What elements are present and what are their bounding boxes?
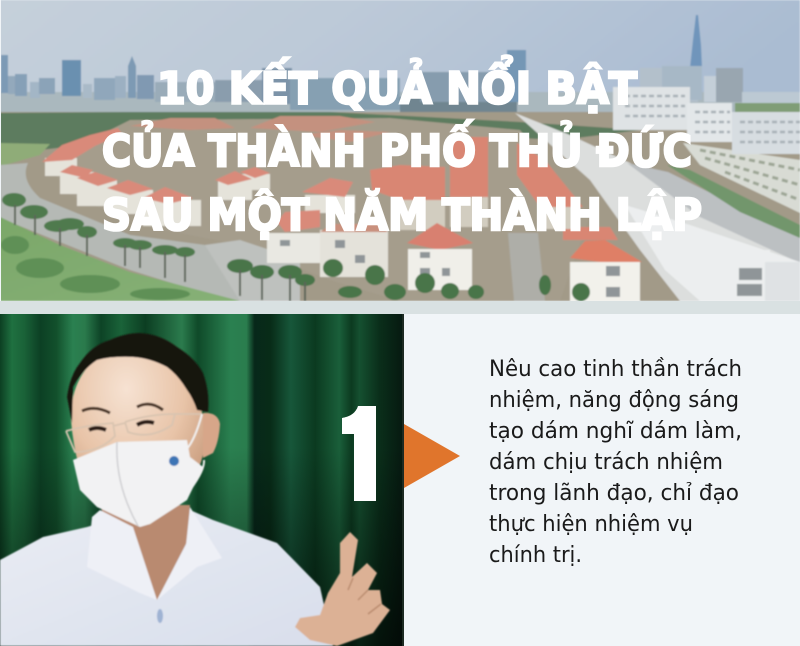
dark right edge bbox=[402, 314, 404, 646]
second villa red roof bbox=[570, 240, 642, 262]
title line 1: 10 KẾT QUẢ NỔI BẬT bbox=[157, 54, 637, 114]
mask strap bbox=[186, 414, 204, 490]
left lawn bbox=[0, 143, 50, 168]
distant skyline left bbox=[1, 55, 292, 104]
palm line bbox=[2, 193, 195, 257]
road centre front bbox=[508, 233, 545, 301]
line 3: tạo dám nghĩ dám làm, bbox=[489, 418, 742, 444]
tree belt bbox=[0, 112, 640, 150]
sky bbox=[1, 0, 800, 93]
lower left grass bbox=[0, 217, 240, 301]
man portrait bbox=[0, 333, 390, 646]
tree trunks bbox=[240, 270, 305, 301]
divider band bbox=[0, 301, 800, 314]
numeral text: 1 bbox=[325, 381, 400, 530]
number 1 bbox=[325, 381, 400, 530]
header aerial photo: Thu Duc city bbox=[0, 0, 800, 301]
face bbox=[71, 355, 203, 525]
green curtain backdrop bbox=[0, 314, 404, 646]
green verge bbox=[667, 165, 800, 238]
junction bbox=[205, 240, 300, 301]
orange arrow bbox=[404, 424, 460, 488]
ear bbox=[203, 413, 220, 458]
shirt button bbox=[157, 609, 163, 623]
apartment window rows bbox=[625, 96, 800, 142]
palm trunks bbox=[15, 205, 185, 282]
shirt collar left bbox=[87, 510, 157, 600]
right terrace housing bbox=[683, 143, 800, 213]
eyebrows bbox=[82, 404, 163, 413]
eyes bbox=[89, 422, 154, 430]
white foreground building bbox=[625, 205, 800, 301]
shirt collar right bbox=[157, 507, 222, 600]
title bbox=[102, 54, 702, 241]
mask logo bbox=[169, 456, 179, 466]
long white terrace block bbox=[515, 113, 800, 301]
line 5: trong lãnh đạo, chỉ đạo bbox=[489, 480, 739, 506]
central red roof rows bbox=[370, 137, 618, 240]
shirt bbox=[0, 510, 333, 646]
front left villa 2 roof bbox=[320, 224, 388, 232]
left curved villa walls bbox=[45, 158, 355, 226]
finger shadow bbox=[348, 578, 381, 614]
terrace window rows bbox=[700, 150, 800, 200]
line 4: dám chịu trách nhiệm bbox=[489, 449, 723, 475]
line 2: nhiệm, năng động sáng bbox=[489, 387, 739, 413]
neck bbox=[100, 505, 190, 600]
ground base bbox=[0, 112, 800, 301]
front villa red roof bbox=[407, 223, 473, 250]
mask centre crease bbox=[117, 442, 138, 526]
right apartment buildings bbox=[613, 87, 800, 154]
title line 3: SAU MỘT NĂM THÀNH LẬP bbox=[102, 188, 702, 241]
windows on buildings bbox=[280, 240, 762, 297]
description text bbox=[489, 356, 742, 568]
hair bbox=[67, 333, 208, 423]
distant skyline right bbox=[290, 15, 800, 120]
line 6: thực hiện nhiệm vụ bbox=[489, 511, 693, 537]
raised hand bbox=[295, 532, 390, 646]
line 1: Nêu cao tinh thần trách bbox=[489, 356, 742, 382]
hazy horizon bbox=[1, 92, 742, 113]
front villa wall bbox=[408, 249, 472, 290]
curtain shading bbox=[0, 314, 404, 646]
central villa mass bbox=[111, 117, 523, 139]
lower left bushes bbox=[1, 236, 190, 300]
curved road on left bbox=[1, 162, 240, 301]
portrait photo panel bbox=[0, 314, 404, 646]
face mask bbox=[73, 440, 203, 527]
far small red roofs bbox=[130, 116, 390, 142]
numeral shape bbox=[342, 406, 376, 501]
second villa wall bbox=[570, 262, 640, 301]
front left villa 2 walls bbox=[320, 230, 388, 277]
central villa walls bbox=[400, 197, 580, 230]
foreground trees bbox=[227, 259, 590, 301]
glasses bbox=[66, 414, 202, 452]
title line 2: CỦA THÀNH PHỐ THỦ ĐỨC bbox=[102, 119, 692, 177]
left villa red roofs bbox=[42, 128, 353, 232]
terrace road bbox=[627, 163, 800, 263]
line 7: chính trị. bbox=[489, 542, 582, 568]
front left villa walls bbox=[267, 233, 320, 263]
